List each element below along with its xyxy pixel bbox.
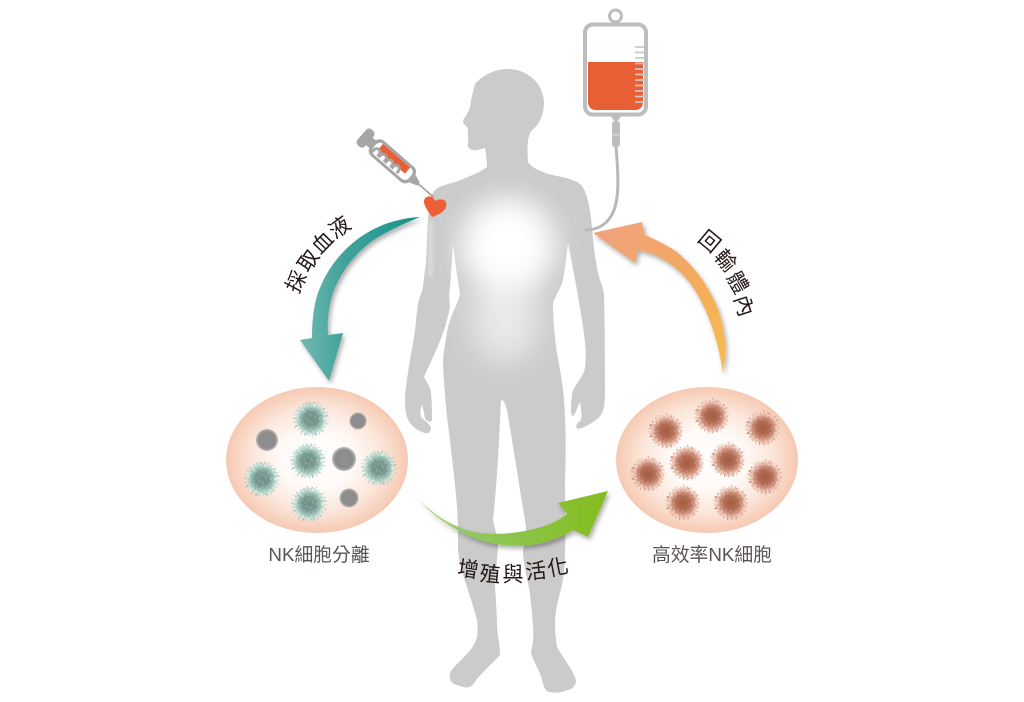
label: 採取血液: 採 <box>282 267 312 297</box>
label: 回輸體內: 內 <box>729 292 757 320</box>
label: 採取血液: 取 <box>294 246 324 276</box>
label: 增殖與活化: 與 <box>502 564 524 586</box>
label: 增殖與活化: 殖 <box>479 563 501 587</box>
label: 採取血液: 液 <box>325 213 355 243</box>
label: 回輸體內: 輸 <box>709 246 741 276</box>
label: 高效率NK細胞: 高效率NK細胞 <box>652 544 772 565</box>
dish: NK cell isolation <box>226 387 408 533</box>
dish: high-efficiency NK cells <box>616 387 798 533</box>
label: 回輸體內: 體 <box>722 268 752 298</box>
syringe <box>355 127 440 205</box>
teal NK cells <box>246 402 396 520</box>
label: 回輸體內 <box>694 226 757 320</box>
label: 增殖與活化: 活 <box>524 559 548 585</box>
body silhouette <box>405 69 605 693</box>
red NK cells <box>632 400 781 519</box>
label: 採取血液: 血 <box>307 227 339 259</box>
grey cells <box>256 412 366 508</box>
arrow: draw blood <box>300 217 420 381</box>
arrow: return to body <box>593 222 725 373</box>
label: NK細胞分離: NK細胞分離 <box>268 544 370 565</box>
label: 增殖與活化 <box>456 555 571 587</box>
label: 增殖與活化: 化 <box>545 555 571 581</box>
IV blood bag <box>585 10 646 230</box>
label: 回輸體內: 回 <box>694 226 724 258</box>
label: 增殖與活化: 增 <box>456 557 480 583</box>
arrow: expansion and activation <box>418 491 608 546</box>
label: 採取血液 <box>282 213 355 297</box>
icon: heart <box>424 196 446 217</box>
